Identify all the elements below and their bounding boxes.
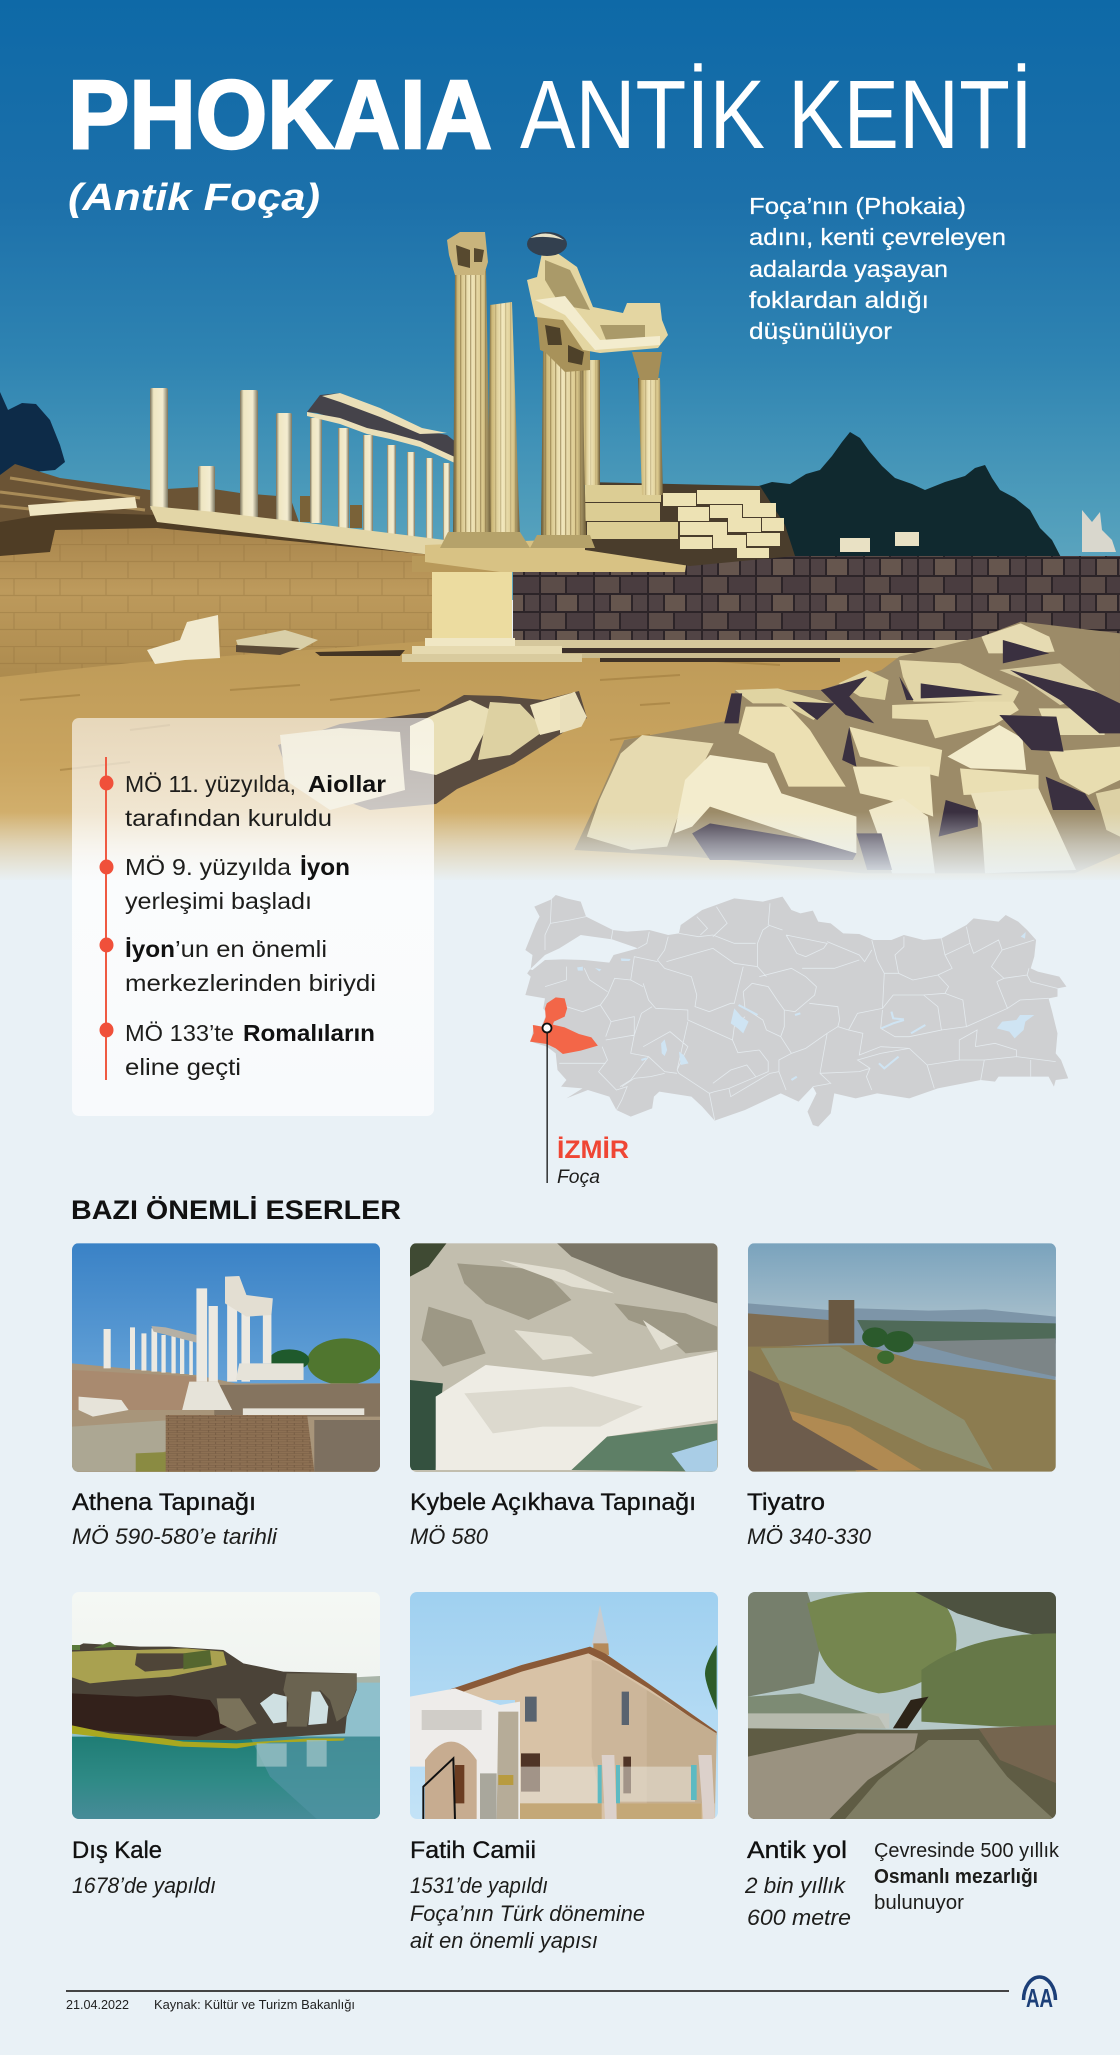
column bases [440,532,595,548]
description text: 600 metre [747,1905,851,1930]
rock pile behind panel [278,691,587,810]
card: Antik yol [744,1591,1060,1930]
timeline item 4: MÖ 133’te [125,1020,234,1046]
photo: mosque [405,1590,725,1825]
side note: bulunuyor [874,1892,964,1914]
timeline item 2: MÖ 9. yüzyılda [125,854,291,880]
right wall [513,556,1120,640]
colonnade [150,388,470,556]
title [68,60,1033,169]
source: Kaynak: Kültür ve Turizm Bakanlığı [154,1997,355,2012]
intro text: foklardan aldığı [749,287,929,313]
timeline item 3 [100,936,376,996]
fallen blocks on the right [560,622,1120,873]
timeline item 1 [100,771,386,831]
capital of large column [447,232,488,275]
platform [425,538,690,572]
base ledge [150,506,444,554]
front column capital [537,317,590,372]
card: Kybele Açıkhava Tapınağı [410,1243,719,1549]
title text: Kybele Açıkhava Tapınağı [410,1489,696,1516]
row of columns [310,418,322,523]
right column [638,378,663,495]
date text: 1678’de yapıldı [72,1873,216,1898]
timeline line [105,757,107,1080]
map of Turkey [525,895,1068,1127]
lying column [28,497,137,516]
intro text: düşünülüyor [749,318,892,344]
side note: Osmanlı mezarlığı [874,1866,1038,1888]
steps below right wall [515,640,968,662]
entablature [307,393,457,460]
photo: sea castle [70,1590,390,1825]
subtitle: (Antik Foça) [68,177,320,219]
intro text: adalarda yaşayan [749,256,948,282]
title: PHOKAIA [68,60,492,169]
rear column [582,360,600,485]
left tree [0,392,65,475]
date text: MÖ 340-330 [747,1524,872,1549]
footer [66,1990,1009,2012]
section heading: BAZI ÖNEMLİ ESERLER [71,1195,401,1225]
back wall pieces [300,496,362,528]
broken column [488,302,520,540]
fallen stones by wall [147,615,405,664]
timeline item 4: eline geçti [125,1054,241,1080]
intro text: Foça’nın (Phokaia) [749,193,966,219]
timeline item 3: ’un en önemli [175,936,327,962]
title text: Dış Kale [72,1837,162,1864]
title text: Tiyatro [747,1489,825,1516]
right tree [759,432,1060,556]
date text: MÖ 580 [410,1524,489,1549]
free standing columns [150,388,168,510]
card: Tiyatro [747,1243,1056,1549]
statue [1082,510,1116,552]
card: Dış Kale [70,1590,390,1898]
large column [453,270,491,540]
photo: rock sanctuary [410,1243,719,1473]
stone blocks [585,482,919,566]
timeline item 2 [100,854,350,914]
capital of right column [632,352,662,380]
description text [410,1873,645,1953]
side note: Çevresinde 500 yıllık [874,1840,1060,1862]
timeline item 4: Romalıların [243,1020,375,1046]
timeline item 3: merkezlerinden biriydi [125,970,376,996]
description text: 2 bin yıllık [744,1873,846,1898]
sky [0,0,1120,600]
timeline item 2: yerleşimi başladı [125,888,312,914]
location marker and label [542,1024,629,1188]
panel: history timeline [72,718,434,1116]
left wall [0,512,443,677]
ground [0,640,1120,880]
front column [541,350,586,540]
İzmir province [530,997,598,1054]
card: Fatih Camii [405,1590,725,1953]
intro text: adını, kenti çevreleyen [749,224,1006,250]
timeline item 3: İyon [125,936,175,962]
pedestal [402,556,582,662]
timeline item 2: İyon [300,854,350,880]
intro text [749,193,1006,344]
description text [744,1873,851,1930]
title text: Athena Tapınağı [72,1489,256,1516]
temple columns [440,232,668,548]
date text: MÖ 590-580’e tarihli [72,1524,278,1549]
temple entablature [527,250,668,353]
ground texture [20,655,780,770]
fade into page [0,812,1120,882]
back terrace [0,464,299,522]
title: ANTİK KENTİ [520,60,1033,169]
photo: ancient theatre [748,1243,1056,1472]
photo: temple [71,1243,381,1473]
rock shadows [692,640,1120,870]
logo: AA: AA [1026,1983,1053,2013]
hero photo: ruins of the temple [0,0,1120,882]
location marker and label: Foça [557,1167,600,1188]
logo: AA [1024,1977,1056,2013]
location marker and label: İZMİR [557,1136,629,1164]
card: Athena Tapınağı [71,1243,381,1549]
timeline item 1: Aiollar [308,771,386,797]
top stone [527,232,567,256]
photo: ancient road [748,1591,1057,1822]
timeline item 1: tarafından kuruldu [125,805,332,831]
description text: 1531’de yapıldı [410,1873,548,1898]
description text: ait en önemli yapısı [410,1928,598,1953]
side note [874,1840,1060,1914]
timeline item 4 [100,1020,375,1080]
timeline item 1: MÖ 11. yüzyılda, [125,771,296,797]
date: 21.04.2022 [66,1997,129,2012]
title text: Fatih Camii [410,1837,536,1864]
description text: Foça’nın Türk dönemine [410,1901,645,1926]
title text: Antik yol [747,1837,847,1864]
